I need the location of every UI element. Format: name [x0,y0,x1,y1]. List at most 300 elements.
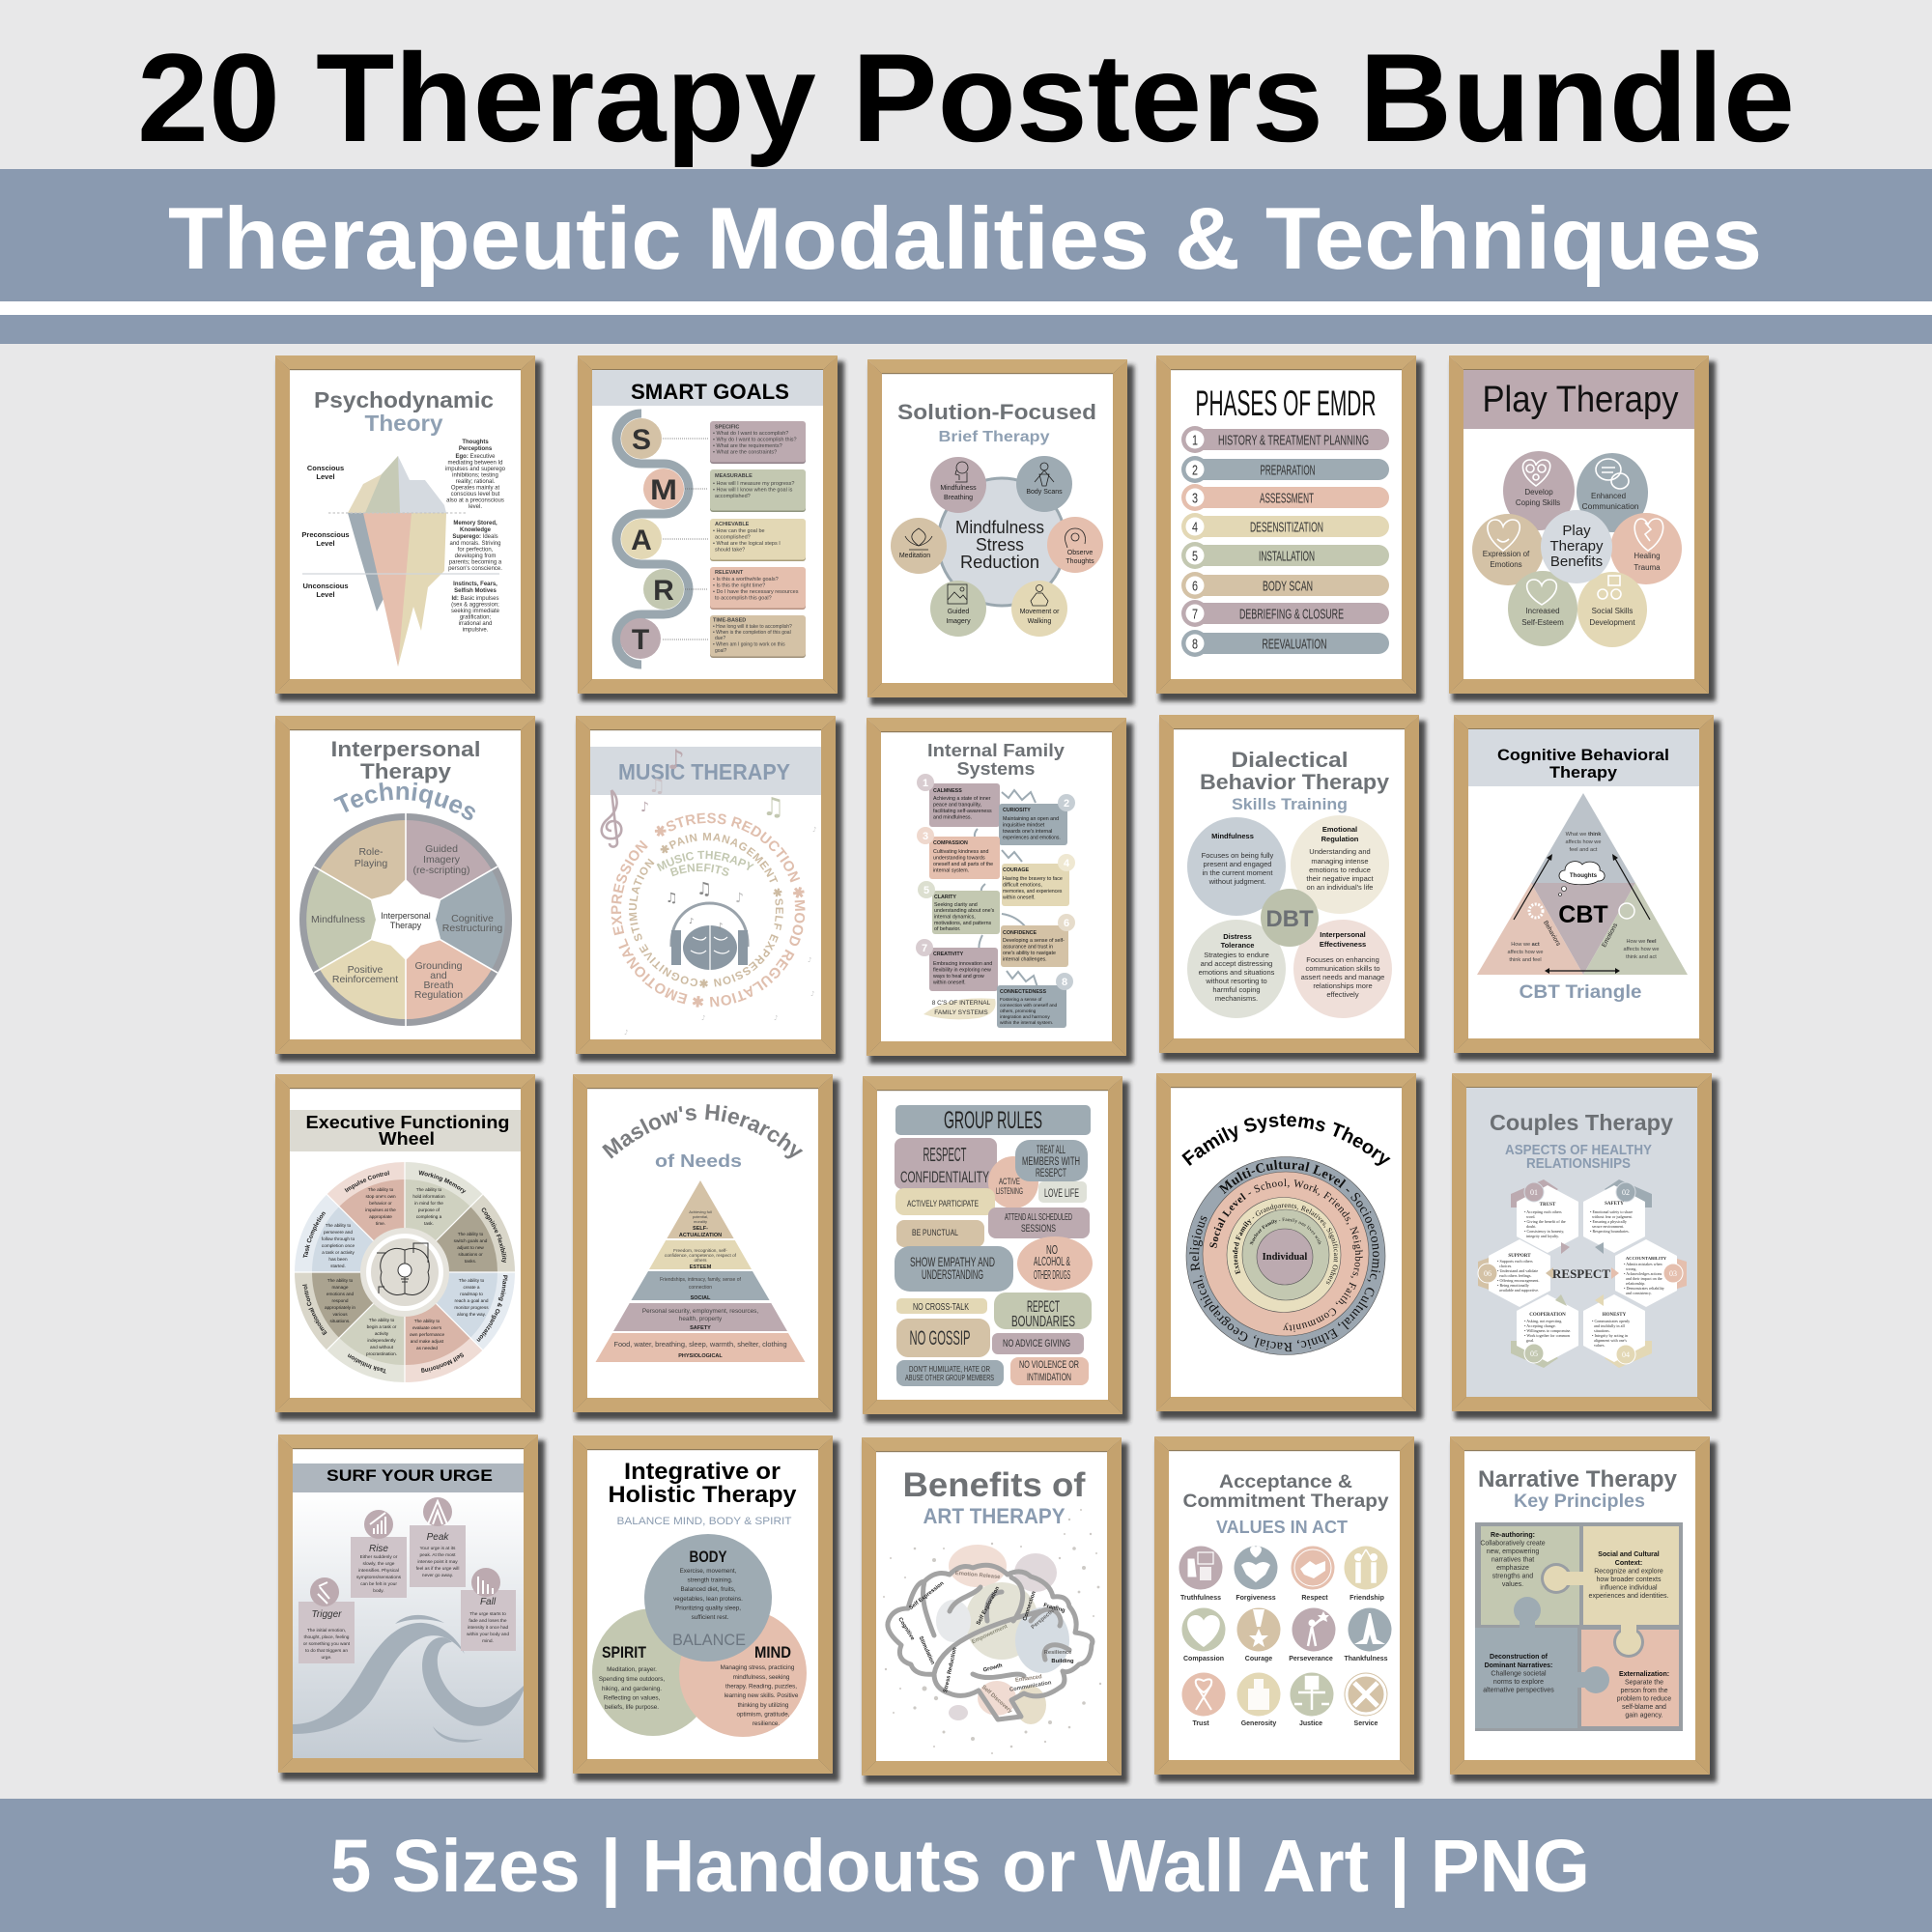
puzzle text: norms to explore [1493,1679,1544,1686]
puzzle text: self-blame and [1622,1704,1666,1711]
rule texts: INTIMIDATION [1027,1372,1071,1383]
skill circles: Effectiveness [1320,940,1366,949]
stage cards: can be felt in your [360,1581,397,1587]
gradient background [293,1492,524,1758]
venn text: resilience. [753,1720,780,1727]
stage cards [298,1497,516,1663]
music notes: ♪ [810,990,814,998]
DBT center: DBT [1265,906,1314,932]
seven C cards: Maintaining an open and [1003,816,1059,822]
subtitle: ART THERAPY [923,1504,1065,1528]
right column text: seeking immediate [451,609,500,614]
music notes: ♪ [689,917,694,925]
stage cards: within your body and [467,1632,509,1637]
central hub: Reduction [960,553,1039,572]
brain labels [896,1571,1074,1715]
CBT triangle: Behaviors [1542,920,1562,948]
pointers [1546,1242,1619,1306]
rule texts: ABUSE OTHER GROUP MEMBERS [905,1373,994,1382]
poster: Benefits of Art Therapy [862,1437,1128,1783]
header band [293,1463,524,1492]
CBT triangle: How we feel [1626,939,1657,945]
goal boxes: to accomplish this goal? [715,595,772,601]
rule texts: NO ADVICE GIVING [1003,1338,1070,1350]
goal boxes: • How can the goal be [713,528,765,534]
curved subtitle: Techniques [333,782,475,820]
puzzle text: narratives that [1492,1557,1534,1563]
value labels: Generosity [1241,1720,1276,1727]
wedge descriptions: hold information [412,1194,445,1199]
value labels: Perseverance [1289,1656,1333,1662]
skill circles: and accept distressing [1201,959,1272,968]
title: MUSIC THERAPY [618,759,790,784]
rule texts: ACTIVE [999,1177,1020,1186]
CBT triangle: CBT [1558,901,1608,928]
hexagon text: integrity and loyalty. [1526,1234,1559,1238]
seven C cards: one's ability to navigate [1003,951,1056,956]
venn text: Managing stress, practicing [721,1664,795,1671]
hexagon text: • Demonstrates reliability [1624,1286,1665,1291]
rule blobs [895,1138,1093,1386]
seven C cards: Embracing innovation and [933,961,992,967]
rule texts: LOVE LIFE [1044,1186,1079,1200]
wheel labels: (re-scripting) [413,865,469,876]
rule texts: ALCOHOL & [1034,1254,1070,1268]
wedge descriptions: behavior or [369,1201,392,1206]
pyramid: Personal security, employment, resources, [642,1308,758,1315]
number badges: 02 [1622,1188,1630,1197]
puzzle text: new, empowering [1487,1548,1539,1555]
right column text: also at a preconscious [446,498,504,504]
right column text: Selfish Motives [454,588,497,594]
number badges: 03 [1669,1269,1677,1278]
skill circles: in the current moment [1203,868,1273,877]
hexagon text: doubt. [1526,1224,1536,1229]
phase bars: DESENSITIZATION [1250,520,1323,535]
skill circles: Emotional [1322,825,1357,834]
seven C cards: COMPASSION [933,840,968,846]
skill circles: emotions and situations [1199,968,1275,977]
puzzle text: Context: [1615,1560,1642,1567]
right column text: inhibitions; testing [452,473,498,479]
header band [590,747,821,795]
goal boxes: • What are the requirements? [713,443,782,449]
value labels: Trust [1192,1720,1209,1727]
pyramid: ESTEEM [690,1264,712,1270]
subtitle banner [0,169,1932,344]
rule texts: CONFIDENTIALITY [900,1168,989,1186]
pyramid: health, property [679,1316,723,1322]
pyramid: connection [689,1285,712,1291]
brain labels: Framing [1042,1603,1066,1614]
letter circles: S [632,424,651,456]
rule texts: UNDERSTANDING [922,1266,983,1282]
seven C cards: 6 [1064,918,1069,929]
number badges: 04 [1622,1350,1630,1359]
wedge descriptions: situations. [329,1319,351,1323]
hexagon text: situations. [1594,1328,1610,1333]
puzzle text: strengths and [1492,1573,1533,1580]
hexagon text: word. [1526,1214,1535,1219]
stage cards: The initial emotion, [307,1628,346,1634]
wheel labels: and [430,970,447,981]
title: Cognitive Behavioral [1497,746,1669,764]
puzzle text: Deconstruction of [1490,1654,1548,1661]
wedge descriptions: along the way. [457,1312,486,1317]
phase bars: 6 [1192,578,1198,595]
pyramid: others [694,1258,707,1263]
satellite circles: Meditation [899,553,930,559]
center circle: Therapy [1549,538,1604,554]
venn labels: MIND [754,1643,791,1662]
wedge descriptions: appropriately in [325,1305,355,1310]
seven C cards: Fostering a sense of [1000,997,1042,1003]
value labels [1180,1595,1388,1727]
wheel labels: Interpersonal [381,911,431,921]
center circle [1541,510,1612,583]
goal boxes: • When am I going to work on this [713,641,785,647]
RESPECT label: RESPECT [1552,1266,1610,1281]
right column text: impulses and superego [445,467,506,472]
header [895,1105,1091,1135]
hexagon text: HONESTY [1603,1313,1627,1318]
wedge descriptions: a task or activity [322,1250,355,1255]
wedge descriptions: evaluate one's [412,1325,442,1330]
value labels: Justice [1299,1720,1322,1727]
rim labels: Emotional Control [302,1285,327,1335]
stage cards: feel as if the urge will [416,1566,459,1572]
poster: Internal Family Systems [867,718,1133,1064]
skill circles: present and engaged [1204,860,1271,868]
brain labels: Stress Reduction [943,1646,958,1693]
skill circles: communication skills to [1305,964,1380,973]
wedge descriptions: completion once [322,1243,355,1248]
wedge descriptions: roadmap to [460,1292,483,1296]
brain labels: Connection [1022,1590,1037,1622]
number badges [1478,1182,1683,1364]
goal boxes: • What are the constraints? [713,450,777,456]
icon: treble clef and notes: ♪ [640,800,649,815]
satellite circles: Thoughts [1065,558,1094,565]
rule texts: ACTIVELY PARTICIPATE [907,1199,979,1208]
puzzle text: gain agency. [1625,1712,1663,1719]
value circles [1179,1546,1391,1716]
wedge descriptions: procrastination. [366,1351,397,1356]
CBT triangle: think and feel [1509,957,1542,963]
level labels: Conscious [307,464,344,472]
title: Acceptance & [1219,1471,1352,1492]
poster: Phases of EMDR [1156,355,1423,701]
footer banner: 5 Sizes | Handouts or Wall Art | PNG [330,1825,1590,1908]
subtitle: Key Principles [1514,1492,1645,1512]
music notes: ♪ [718,922,723,930]
value labels: Respect [1301,1595,1328,1602]
right column text: for perfection, [458,547,494,553]
puzzle text [1480,1532,1671,1719]
stage cards: thought, place, feeling [304,1634,350,1640]
title: Couples Therapy [1490,1110,1673,1135]
phase bars: 4 [1192,520,1198,535]
phase bars: BODY SCAN [1263,578,1313,595]
wedge descriptions: as needed [416,1346,438,1350]
satellite circles: Walking [1028,618,1051,625]
goal boxes: • What are the logical steps I [713,541,781,547]
wedge descriptions: create a [464,1285,480,1290]
CBT triangle: think and act [1626,954,1657,960]
music notes: ♪ [808,956,811,964]
stage cards: intense point it may [417,1559,458,1565]
title: PHASES OF EMDR [1196,384,1376,423]
wheel labels: Role- [358,846,384,858]
hexagon text: relationship. [1626,1281,1645,1286]
rule texts: NO VIOLENCE OR [1019,1359,1079,1371]
wedge descriptions: The ability to [416,1187,442,1192]
hexagon text: and their impact on the [1626,1276,1662,1281]
wedge descriptions: The ability to [414,1319,440,1323]
brain outline [888,1565,1093,1719]
seven C cards: and mindfulness. [933,815,972,821]
wedge descriptions: independently [367,1338,396,1343]
music notes [624,826,816,1037]
goal boxes: • When is the completion of this goal [713,630,791,636]
hexagon text: wrong. [1626,1266,1636,1271]
goal boxes: • How will I measure my progress? [713,481,794,487]
central hub: Mindfulness [955,518,1044,537]
letter circles: M [650,474,677,506]
stage cards: fade and loses the [469,1618,507,1624]
wedge descriptions: monitor progress [454,1305,489,1310]
puzzle [1475,1522,1683,1731]
music notes: ♫ [666,891,678,906]
seven C cards: difficult emotions, [1003,883,1042,889]
seven C cards: within oneself. [933,980,966,985]
flower petals [1472,451,1682,647]
iceberg [302,456,499,667]
title [314,387,494,436]
hexagon text: SAFETY [1605,1202,1624,1207]
title: Narrative Therapy [1478,1466,1678,1492]
seven C cards: CURIOSITY [1003,808,1031,813]
stage cards: Your urge is at its [420,1546,456,1551]
right column text: developing from [455,554,496,559]
seven C cards: 1 [923,778,928,789]
brain labels: Perspectives [1031,1604,1061,1631]
flower petals: Communication [1581,501,1639,511]
hexagon text: • Willingness to compromise. [1524,1328,1571,1333]
CBT triangle: Emotions [1601,922,1619,949]
wedge descriptions: The ability to [458,1232,484,1236]
skill circles: Distress [1223,932,1252,941]
puzzle text: problem to reduce [1617,1696,1671,1702]
level labels: Preconscious [301,530,350,539]
flower petals: Increased [1525,607,1560,615]
hexagon text: and consistency. [1626,1291,1652,1295]
stage cards: body. [373,1588,384,1594]
music notes: ♪ [812,826,816,834]
seven C cards: CONNECTEDNESS [1000,989,1046,995]
wedge descriptions: and make adjust [411,1339,444,1344]
flower petals: Enhanced [1591,492,1626,500]
poster: Play Therapy [1449,355,1716,701]
stage cards: mind. [482,1638,494,1644]
title: SURF YOUR URGE [327,1467,493,1485]
ring labels: Nuclear Family - Family one lives with [1250,1217,1321,1245]
goal boxes: RELEVANT [715,570,744,576]
wedge descriptions: in mind for the [414,1201,443,1206]
skill circles: their negative impact [1306,874,1375,883]
subtitle: VALUES IN ACT [1216,1518,1348,1537]
right column text: person's conscience. [448,566,502,572]
skill circles: Understanding and [1309,847,1371,856]
pyramid: confidence, competence, respect of [665,1253,737,1258]
right column text: Superego: Ideals [452,534,498,540]
satellite circles: Mindfulness [940,485,977,492]
serpentine ribbon [616,413,689,665]
seven C cards: internal dynamics, [934,914,976,920]
music notes: ♪ [735,891,744,906]
icon: treble clef and notes: ♫ [648,774,666,797]
poster: Executive Functioning Wheel [274,1074,546,1424]
phase bars: 1 [1192,433,1198,448]
title [1182,1471,1389,1512]
seven C cards: Seeking clarity and [934,902,978,908]
header band [1468,729,1699,786]
seven C cards: understanding towards [933,856,985,862]
puzzle text: Externalization: [1619,1671,1669,1678]
hexagon text: • Giving the benefit of the [1524,1219,1566,1224]
DBT center [1261,889,1319,947]
wedge descriptions: follow through to [322,1236,355,1241]
ribbon tabs [1478,1179,1687,1368]
seven C cards: internal system. [933,867,969,873]
title [927,741,1065,779]
seven C cards: COURAGE [1003,867,1030,873]
stage cards: Trigger [312,1609,342,1620]
puzzle text: Challenge societal [1491,1671,1547,1677]
poster: Psychodynamic Theory [275,355,542,701]
title [330,737,481,783]
pyramid: morality [694,1219,707,1224]
venn labels [602,1548,791,1662]
level labels [301,464,350,599]
squiggle arrows [975,790,1037,987]
seven C cards: others, promoting [1000,1009,1037,1014]
seven C cards: oneself and all parts of the [933,862,993,867]
skill circles: Regulation [1321,835,1359,843]
pyramid: Achieving full [689,1209,712,1214]
pyramid [595,1180,806,1362]
flower petals: Social Skills [1592,607,1633,615]
right column text: conscious level but [451,492,500,497]
seven C cards: within the internal system. [1000,1020,1053,1026]
phase bars: 5 [1192,549,1198,564]
goal boxes: accomplished? [715,535,751,541]
venn text: mindfulness, seeking [733,1674,790,1681]
value labels: Friendship [1350,1595,1384,1602]
wheel labels: Mindfulness [311,914,365,925]
wheel labels: Restructuring [442,923,502,934]
seven C cards: 2 [1064,798,1069,810]
hexagon text: • Respecting boundaries. [1590,1229,1630,1234]
pyramid: Food, water, breathing, sleep, warmth, shelter, clothing [613,1340,787,1349]
seven C cards: assurance and trust in [1003,945,1053,951]
goal boxes: • Is this the right time? [713,583,765,589]
puzzle text: Collaboratively create [1480,1540,1546,1548]
stage cards: peak. At the most [419,1552,456,1558]
brush label: FAMILY SYSTEMS [934,1009,988,1016]
rim labels: Impulse Control [344,1171,390,1192]
CBT triangle: How we act [1511,942,1540,948]
subtitle: RELATIONSHIPS [1526,1156,1631,1172]
subtitle banner: Therapeutic Modalities & Techniques [168,190,1762,288]
venn text: vegetables, lean proteins. [673,1596,743,1603]
center arcs: MUSIC THERAPY [657,850,754,871]
wedge descriptions: and without [370,1345,394,1350]
hexagon text: • Integrity by acting in [1592,1333,1628,1338]
venn text: strength training. [688,1577,733,1584]
satellite circles: Observe [1067,550,1093,556]
title: Commitment Therapy [1182,1491,1389,1512]
pyramid: SOCIAL [691,1295,711,1301]
ring labels: Social Level - School, Work, Friends, Neighbors, Faith, Community [1209,1179,1363,1332]
title: Systems [956,759,1036,779]
hexagon text: • Consistency in honesty, [1524,1229,1564,1235]
icon: treble clef and notes: ♫ [762,793,784,822]
title [1200,748,1389,794]
wedge descriptions: switch goals and [454,1238,488,1243]
right column text: reality; rational. [456,479,496,485]
letter circles: R [653,575,674,607]
right column text: parents; becoming a [449,560,502,566]
level labels: Level [316,539,335,548]
venn text: Prioritizing quality sleep, [675,1605,741,1611]
number badges: 05 [1530,1350,1538,1358]
venn text: Reflecting on values, [604,1694,660,1702]
flower petals: Trauma [1634,563,1661,572]
wedge descriptions: impulses at the [365,1208,396,1212]
phase bars: 2 [1192,462,1198,479]
puzzle text: Re-authoring: [1491,1532,1535,1539]
skill circles: Interpersonal [1320,930,1366,939]
goal boxes: accomplished? [715,494,751,499]
subtitle: of Needs [655,1151,742,1171]
goal boxes: due? [715,636,725,641]
seven C cards: facilitating self-awareness [933,809,992,814]
wheel [295,1162,515,1382]
wedge descriptions: situations or [458,1252,483,1257]
seven C cards: 7 [922,943,927,954]
flower petals: Expression of [1483,550,1530,558]
music notes: ♪ [701,1014,705,1022]
rim labels: Cognitive Flexibility [481,1208,506,1263]
icon: brain with bulb [377,1243,429,1294]
wheel labels: Grounding [414,960,463,972]
hexagon text: secure environment. [1592,1224,1624,1229]
hexagon text: each others feelings. [1499,1273,1532,1278]
pyramid: ACTUALIZATION [679,1233,722,1238]
music notes: ♪ [624,1029,628,1037]
rule texts: NO [1046,1242,1058,1257]
CBT triangle: feel and act [1570,847,1598,853]
title [609,1459,797,1508]
skill circles: Focuses on being fully [1202,851,1274,860]
satellite circles: Body Scans [1026,489,1063,496]
right column text: Operates mainly at [451,485,500,491]
rule texts: TREAT ALL [1037,1145,1065,1156]
rule texts: RESEPCT [1036,1168,1066,1179]
seven C cards: towards one's internal [1003,829,1052,835]
puzzle text: person from the [1620,1688,1668,1694]
